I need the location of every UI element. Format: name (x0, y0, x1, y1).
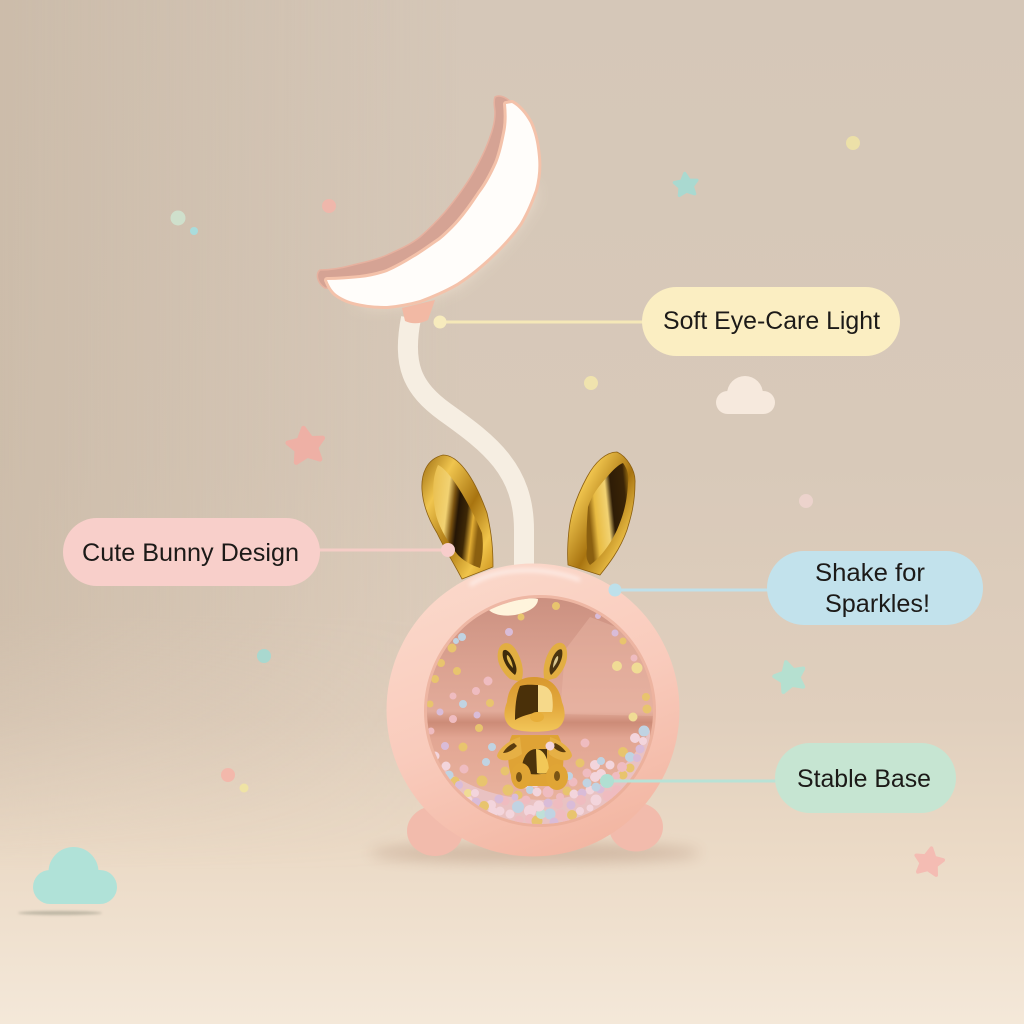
callout: soft eye-care light: Soft Eye-Care Light (663, 307, 880, 335)
callout: soft eye-care light (434, 287, 900, 356)
star: teal right (772, 658, 808, 693)
moon glow (353, 180, 535, 303)
icon: cream cloud (716, 376, 775, 414)
star: teal top right (673, 172, 698, 196)
callout: cute bunny design: Cute Bunny Design (82, 539, 299, 567)
figurine ears (498, 643, 567, 682)
figurine body (508, 735, 563, 786)
moon lit panel (327, 103, 538, 306)
callout: shake for sparkles: Shake for (815, 559, 925, 587)
round body shell (386, 564, 680, 856)
callout: shake for sparkles: Sparkles! (825, 590, 930, 618)
icon: teal cloud (18, 847, 117, 915)
star: pink lower right (914, 846, 945, 876)
callout: stable base: Stable Base (797, 765, 931, 793)
moon lamp head (317, 96, 538, 306)
floor shadow (370, 843, 700, 863)
flexible neck (402, 300, 524, 572)
figurine head (504, 677, 565, 732)
figurine feet (511, 763, 531, 789)
moon back shell (317, 96, 512, 290)
decorative dots (170, 136, 860, 792)
callout: stable base (600, 743, 956, 813)
right ear (568, 452, 635, 575)
lamp illustration (317, 96, 700, 863)
callout: cute bunny design (63, 518, 455, 586)
gold bunny figurine (497, 643, 572, 790)
feet (407, 802, 663, 856)
glass window with sparkles (427, 597, 655, 830)
callout: shake for sparkles (608, 551, 983, 625)
star: pink upper left (286, 426, 326, 463)
figurine chest (522, 749, 547, 774)
left ear (422, 455, 493, 579)
figurine arms (497, 737, 572, 760)
sparkle bed (443, 730, 650, 824)
light reflection (488, 598, 538, 616)
bunny ears (422, 452, 635, 579)
